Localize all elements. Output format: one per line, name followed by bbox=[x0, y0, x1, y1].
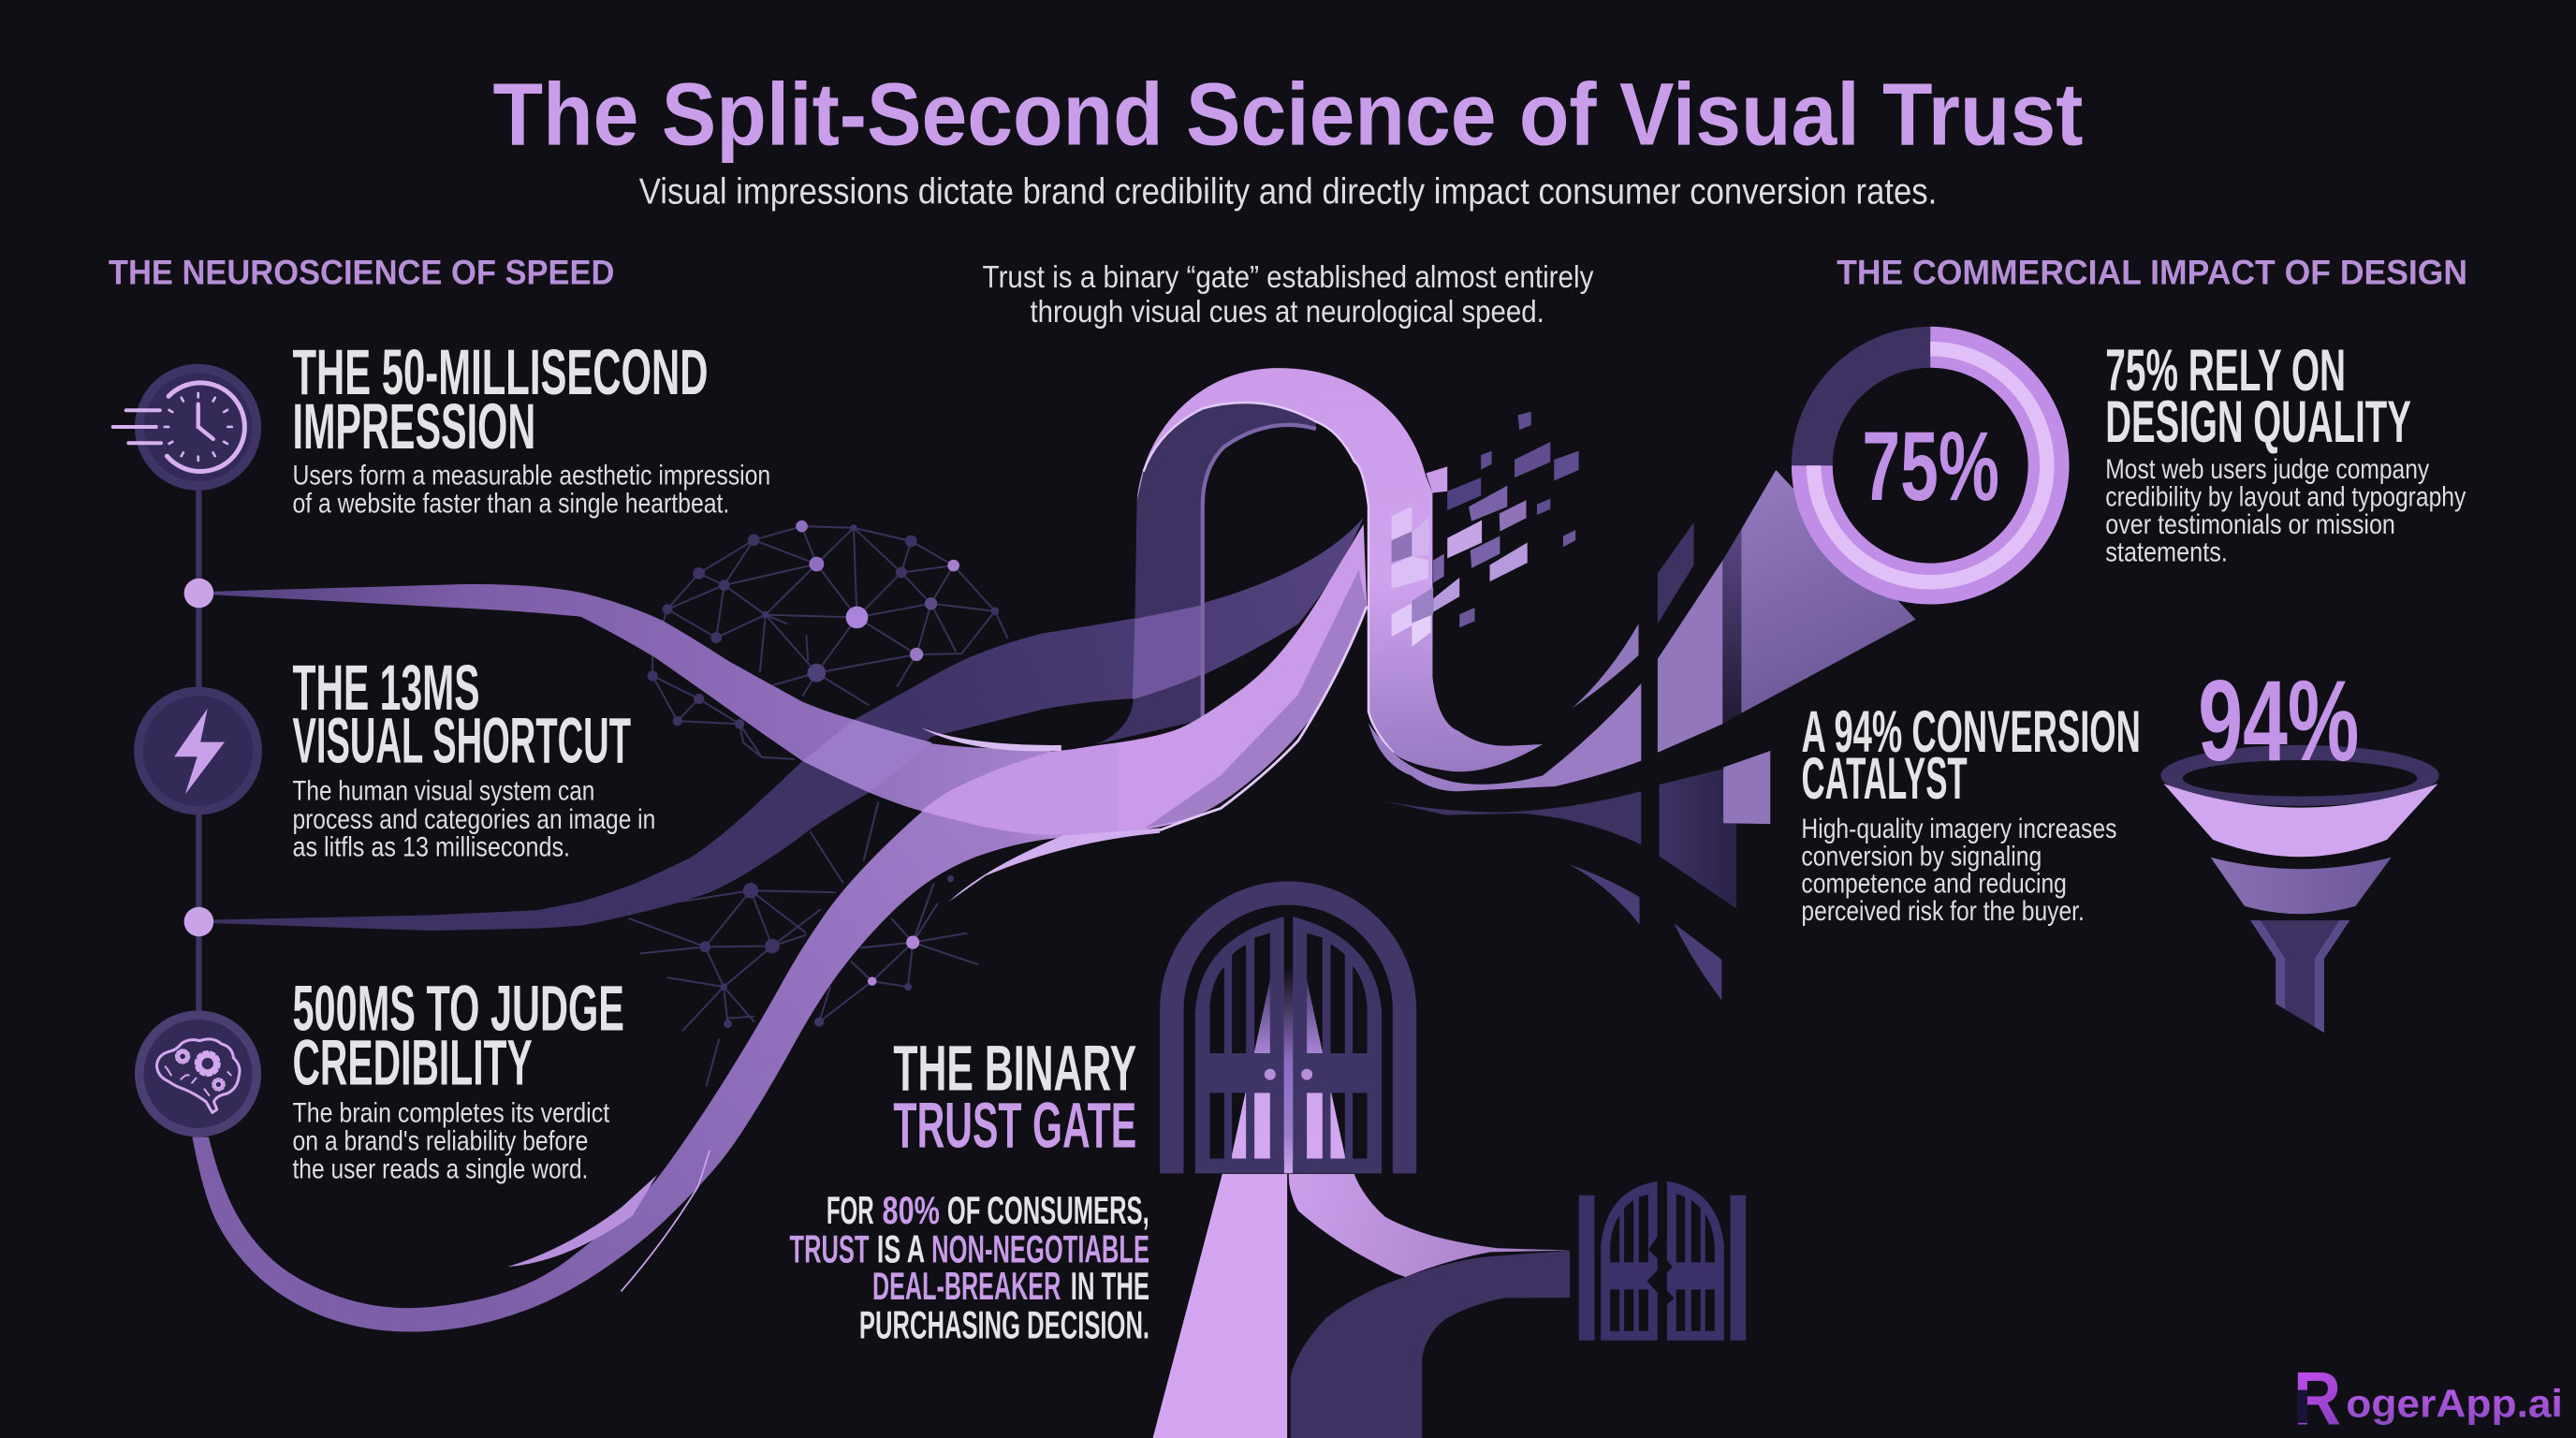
stat: 94 percent: 94% bbox=[2198, 657, 2359, 785]
text block: 50 millisecond impression: of a website faster than a single heartbeat. bbox=[292, 489, 729, 520]
text block: 75 percent rely on design: statements. bbox=[2105, 537, 2228, 568]
text block: 50 millisecond impression: Users form a measurable aesthetic impression bbox=[292, 461, 770, 492]
text block: 80 percent deal breaker: DEAL-BREAKER bbox=[872, 1264, 1061, 1308]
text block: 75 percent rely on design bbox=[2105, 338, 2466, 568]
text block: binary trust gate heading bbox=[893, 1032, 1136, 1162]
ribbon merge: bright overlap bbox=[921, 744, 1117, 835]
text block: 80 percent deal breaker: IS A bbox=[877, 1226, 925, 1270]
text block: 94 percent conversion: CATALYST bbox=[1801, 746, 1968, 812]
ribbon: dark arch of the loop bbox=[1096, 402, 1316, 744]
branch path: dark bbox=[1291, 1251, 1570, 1438]
icon: brain with gears bbox=[135, 1010, 261, 1137]
text block: 80 percent deal breaker: FOR bbox=[827, 1188, 874, 1232]
text block: 80 percent deal breaker: TRUST bbox=[790, 1226, 870, 1270]
ribbon inner line bbox=[1203, 425, 1316, 718]
neural network background bottom bbox=[629, 801, 978, 1086]
ribbon: 50ms mid stream bbox=[213, 584, 1076, 835]
text block: 94 percent conversion: competence and reducing bbox=[1801, 869, 2067, 900]
text block: 75 percent rely on design: over testimonials or mission bbox=[2105, 509, 2395, 540]
text block: 50 millisecond impression: IMPRESSION bbox=[292, 390, 535, 462]
text block: 13ms visual shortcut: process and categories an image in bbox=[292, 804, 655, 835]
text block: 80 percent deal breaker: PURCHASING DECISION. bbox=[859, 1303, 1149, 1347]
text block: 75 percent rely on design: 75% RELY ON bbox=[2105, 338, 2346, 404]
icon: conversion funnel bbox=[2160, 745, 2439, 1033]
text block: 94 percent conversion: A 94% CONVERSION bbox=[1801, 699, 2141, 765]
ribbon light edge bbox=[1061, 607, 1367, 837]
logo: RogerApp.ai: ogerApp.ai bbox=[2346, 1381, 2563, 1425]
center intro text: Trust is a binary “gate” established almost entirely bbox=[983, 260, 1594, 295]
text block: 50 millisecond impression: THE 50-MILLISECOND bbox=[292, 336, 708, 408]
text block: 80 percent deal breaker: NON-NEGOTIABLE bbox=[931, 1226, 1149, 1270]
ribbon shaded fold bbox=[1145, 570, 1367, 829]
icon: open trust gate bbox=[1172, 893, 1404, 1173]
text block: binary trust gate heading: THE BINARY bbox=[893, 1032, 1136, 1104]
ribbon: 13ms dark stream bbox=[212, 518, 1364, 931]
ribbon: light arch of the loop bbox=[1137, 368, 1543, 771]
ribbon overlap highlight bbox=[1133, 606, 1202, 699]
logo: RogerApp.ai bbox=[2293, 1357, 2563, 1438]
text block: 75 percent rely on design: credibility by layout and typography bbox=[2105, 482, 2466, 513]
text block: 13ms visual shortcut: THE 13MS bbox=[292, 652, 480, 724]
center intro text: through visual cues at neurological speed. bbox=[1030, 295, 1544, 330]
icon: lightning bolt bbox=[134, 687, 262, 814]
chart: 75 percent donut bbox=[1812, 347, 2049, 584]
wisps bbox=[507, 727, 1160, 1291]
center intro text bbox=[983, 260, 1594, 330]
icon: broken gate bbox=[1579, 1180, 1746, 1342]
text block: 94 percent conversion: perceived risk for the buyer. bbox=[1801, 896, 2085, 927]
ribbon: credibility light stream bbox=[192, 524, 1367, 1332]
text block: 80 percent deal breaker: IN THE bbox=[1071, 1264, 1149, 1308]
title: The Split-Second Science of Visual Trust bbox=[493, 65, 2083, 164]
text block: 94 percent conversion bbox=[1801, 699, 2141, 927]
text block: 500ms credibility: the user reads a single word. bbox=[292, 1153, 588, 1184]
pixel dissolve bbox=[1392, 412, 1579, 647]
timeline line bbox=[198, 490, 200, 1010]
text block: 13ms visual shortcut bbox=[292, 652, 655, 862]
heading: commercial impact of design: THE COMMERCIAL IMPACT OF DESIGN bbox=[1837, 254, 2467, 292]
text block: 94 percent conversion: conversion by signaling bbox=[1801, 842, 2042, 873]
text block: 50 millisecond impression bbox=[292, 336, 770, 520]
text block: 13ms visual shortcut: VISUAL SHORTCUT bbox=[292, 704, 631, 776]
text block: 500ms credibility: on a brand's reliability before bbox=[292, 1126, 588, 1157]
text block: 80 percent deal breaker: OF CONSUMERS, bbox=[947, 1188, 1149, 1232]
text block: 500ms credibility: 500MS TO JUDGE bbox=[292, 972, 624, 1044]
text block: 500ms credibility: CREDIBILITY bbox=[292, 1026, 533, 1098]
subtitle: Visual impressions dictate brand credibility and directly impact consumer conversion rates. bbox=[639, 172, 1937, 213]
timeline node 2 bbox=[184, 907, 213, 936]
text block: binary trust gate heading: TRUST GATE bbox=[893, 1090, 1136, 1162]
ribbon crossing highlight bbox=[802, 720, 932, 792]
text block: 13ms visual shortcut: The human visual system can bbox=[292, 776, 594, 807]
branch path: light bbox=[1289, 1174, 1570, 1277]
timeline node 1 bbox=[184, 579, 213, 608]
text block: 500ms credibility bbox=[292, 972, 624, 1184]
text block: 80 percent deal breaker bbox=[790, 1188, 1149, 1347]
text block: 94 percent conversion: High-quality imagery increases bbox=[1801, 814, 2116, 844]
light path through the gate bbox=[1153, 1174, 1287, 1438]
ribbon light inner edge bbox=[1144, 403, 1393, 753]
chart: 75 percent donut: 75% bbox=[1862, 412, 1999, 521]
text block: 500ms credibility: The brain completes its verdict bbox=[292, 1098, 610, 1129]
shattered ribbon toward donut bbox=[1368, 470, 1915, 1000]
heading: neuroscience of speed: THE NEUROSCIENCE OF SPEED bbox=[109, 254, 614, 292]
text block: 13ms visual shortcut: as litfls as 13 milliseconds. bbox=[292, 831, 570, 862]
text block: 80 percent deal breaker: 80% bbox=[883, 1188, 940, 1232]
neural network background top bbox=[648, 521, 1008, 759]
icon: fast clock bbox=[113, 364, 261, 491]
text block: 75 percent rely on design: Most web users judge company bbox=[2105, 454, 2429, 485]
